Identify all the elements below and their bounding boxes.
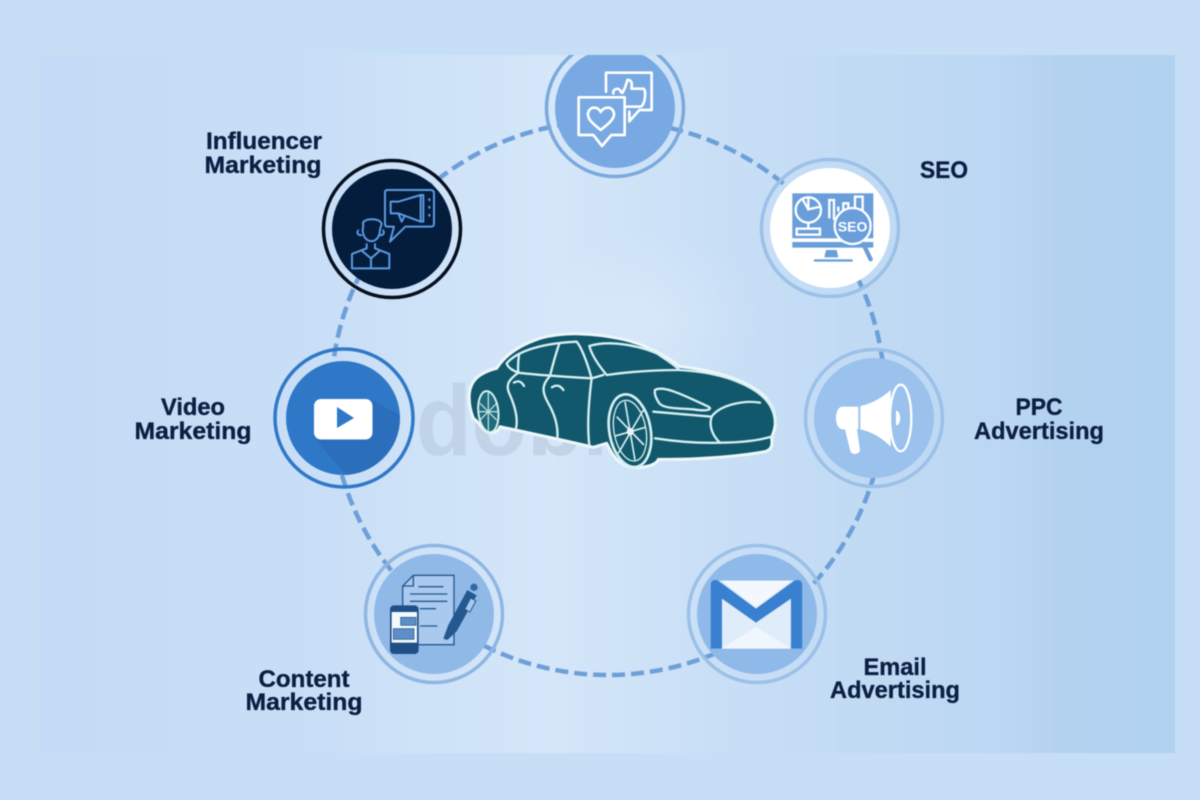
node: content marketing	[366, 546, 502, 682]
node: social media	[546, 40, 684, 176]
car illustration	[469, 334, 775, 470]
label: Content Marketing	[246, 666, 362, 716]
icon: SEO monitor with magnifier: SEO	[838, 218, 868, 234]
label: PPC Advertising: PPC	[1016, 394, 1062, 421]
icon: envelope M	[711, 580, 802, 649]
label: PPC Advertising	[974, 394, 1104, 445]
label: Video Marketing	[134, 394, 252, 445]
icon: document, phone and pen	[390, 575, 478, 654]
node: email advertising	[688, 546, 826, 682]
top frame band	[0, 0, 1200, 55]
watermark: dob.	[416, 365, 608, 477]
label: Content Marketing: Content	[258, 666, 350, 693]
label: Influencer Marketing: Marketing	[204, 152, 322, 179]
label: Email Advertising	[830, 654, 960, 704]
label: Video Marketing: Video	[161, 394, 225, 421]
node: PPC advertising	[806, 350, 942, 486]
label: Email Advertising: Email	[864, 654, 926, 681]
label: Content Marketing: Marketing	[246, 689, 362, 716]
node: SEO	[762, 160, 898, 296]
node: influencer marketing	[324, 160, 460, 298]
node: video marketing	[275, 349, 413, 487]
label: Video Marketing: Marketing	[134, 418, 252, 445]
label: Influencer Marketing: Influencer	[206, 128, 322, 155]
icon: like and heart speech bubbles	[579, 73, 652, 146]
label: Influencer Marketing	[204, 128, 322, 179]
icon: person with megaphone bubble	[352, 190, 434, 268]
car body	[469, 334, 775, 468]
front wheel	[603, 391, 657, 470]
label: PPC Advertising: Advertising	[974, 418, 1104, 445]
label: SEO: SEO	[920, 157, 968, 184]
icon: megaphone	[836, 385, 911, 454]
rear wheel	[476, 390, 500, 433]
label: Email Advertising: Advertising	[830, 677, 960, 704]
icon: play button	[314, 399, 372, 440]
car line work	[507, 342, 775, 445]
dashed connecting ring	[331, 121, 885, 675]
